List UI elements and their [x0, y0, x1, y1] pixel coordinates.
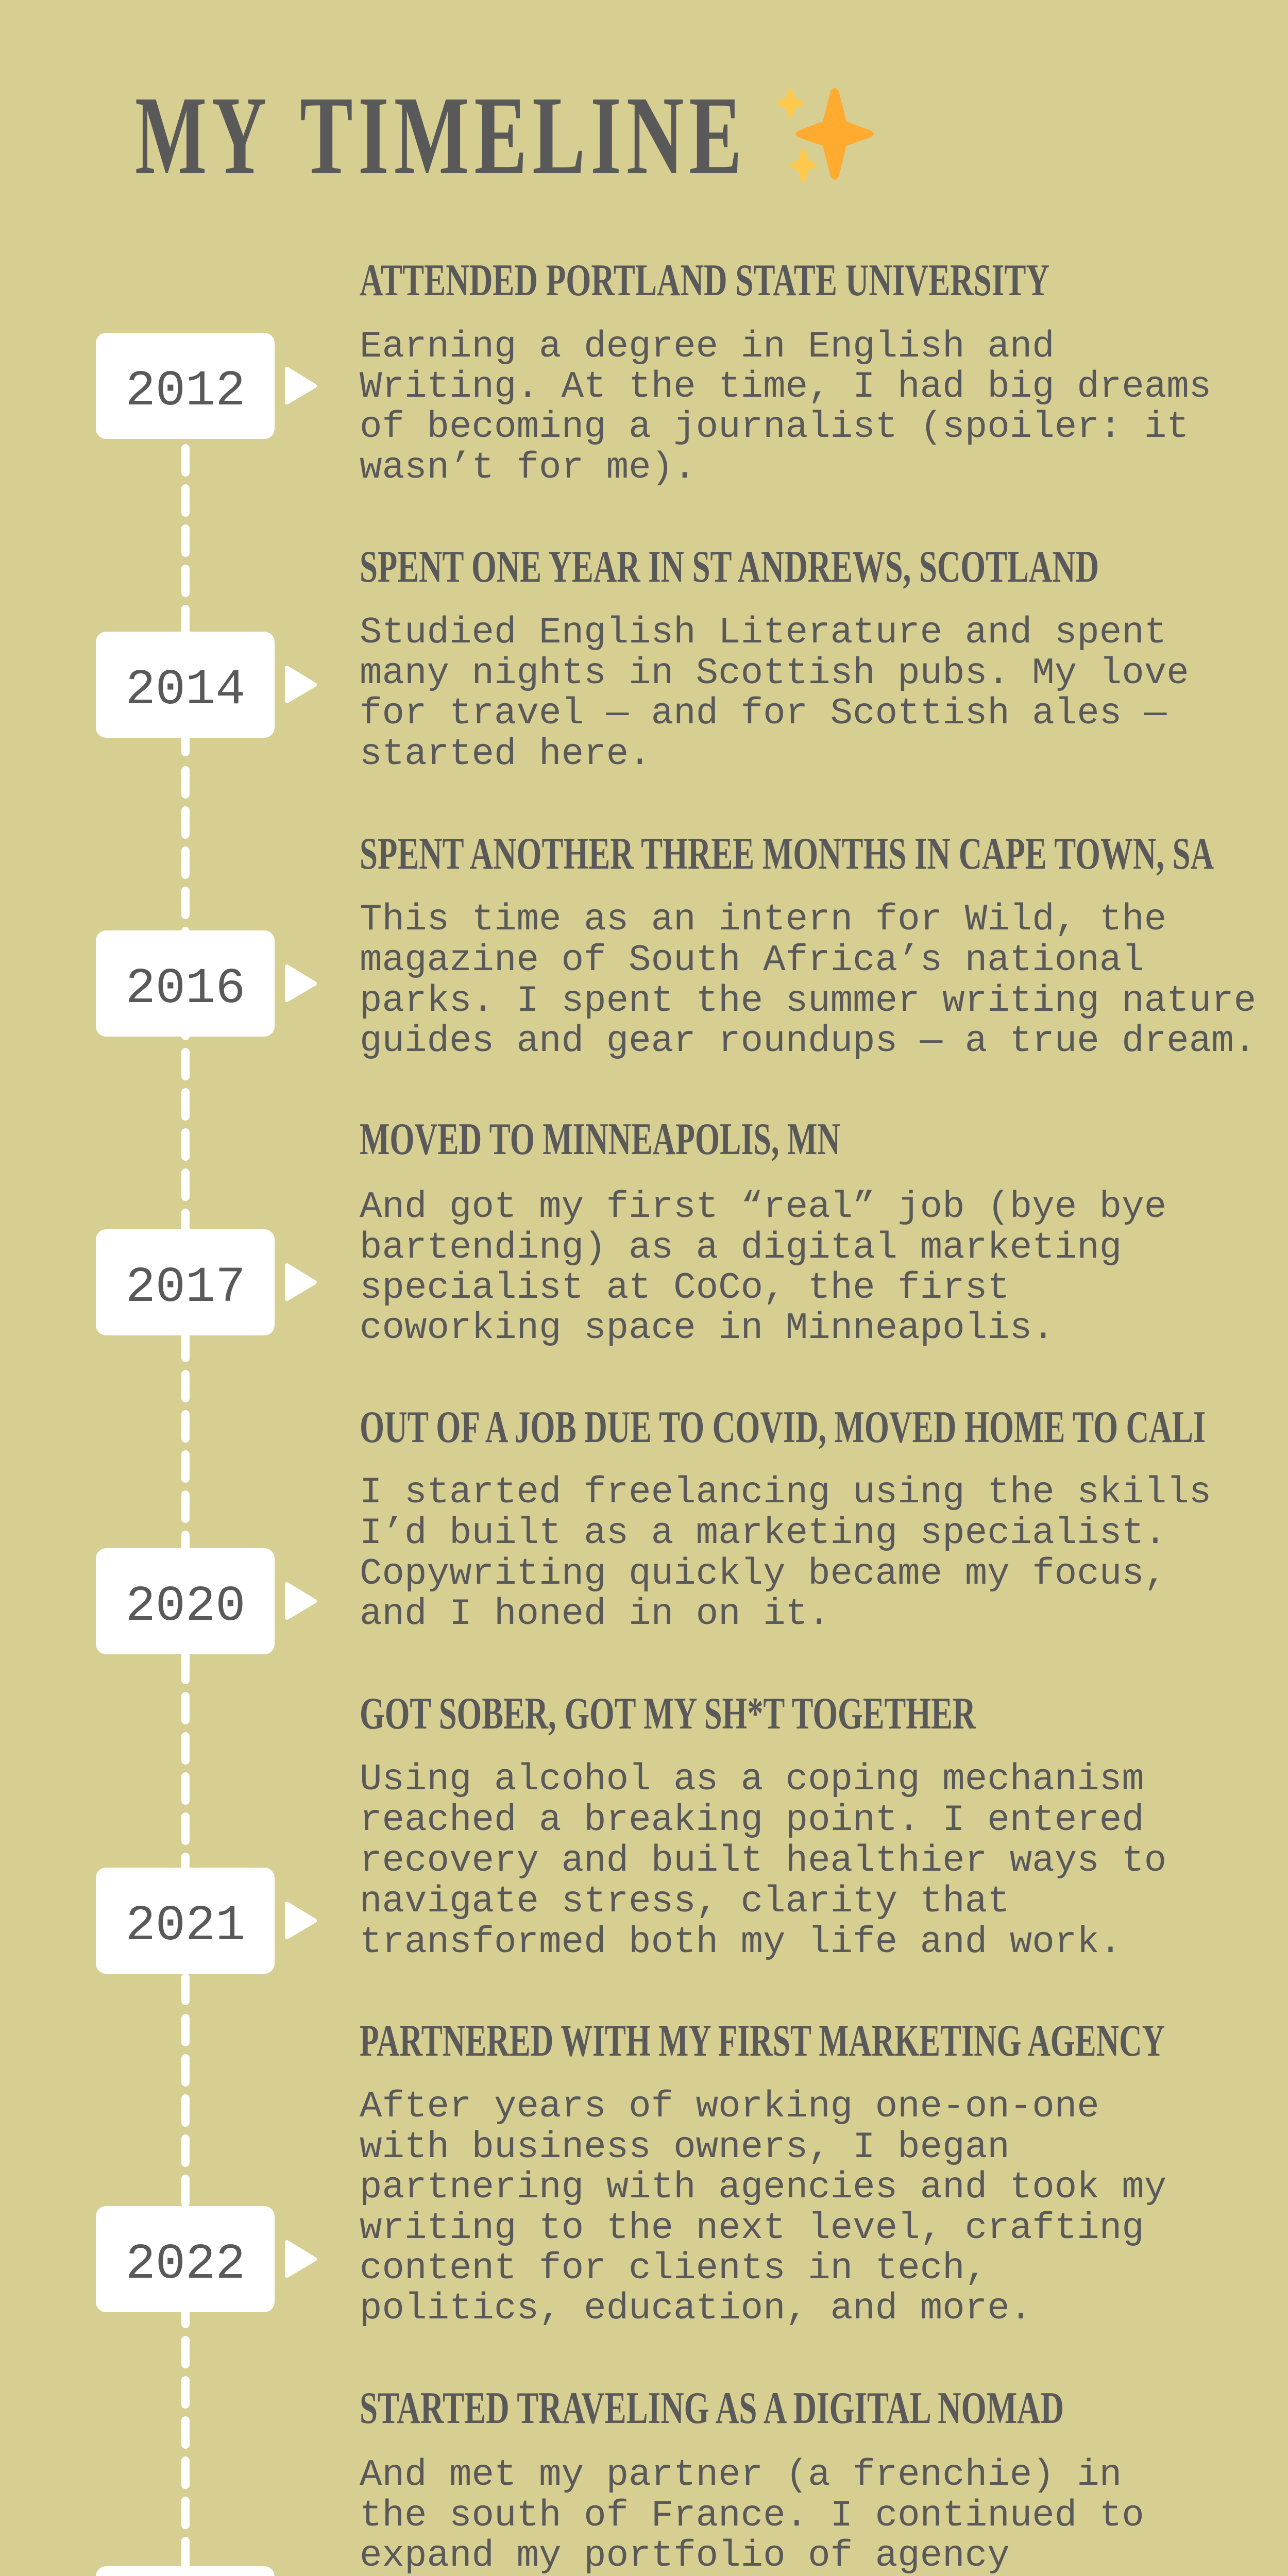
arrow 2020 — [287, 1584, 315, 1618]
text block 2012: wasn’t for me). — [360, 447, 696, 489]
panel: 2017 entry — [96, 1114, 1166, 1349]
heading 2017: MOVED TO MINNEAPOLIS, MN — [360, 1114, 840, 1164]
arrow 2014 — [287, 668, 315, 701]
text block 2021: reached a breaking point. I entered — [360, 1799, 1144, 1841]
text block 2020: I started freelancing using the skills — [360, 1471, 1211, 1514]
text block 2022: writing to the next level, crafting — [360, 2207, 1144, 2249]
text block 2016: magazine of South Africa’s national — [360, 939, 1144, 981]
text block 2016: guides and gear roundups — a true dream. — [360, 1020, 1256, 1062]
text block 2012: of becoming a journalist (spoiler: it — [360, 406, 1189, 448]
year badge 2016 — [96, 930, 275, 1037]
text block 2023 — [360, 2454, 1144, 2576]
text block 2017: specialist at CoCo, the first — [360, 1267, 1010, 1309]
text block 2023: the south of France. I continued to — [360, 2495, 1144, 2537]
year badge 2012: 2012 — [126, 363, 245, 420]
text block 2021: recovery and built healthier ways to — [360, 1840, 1166, 1882]
panel: 2023 entry — [96, 2383, 1144, 2576]
year badge 2021 — [96, 1868, 275, 1974]
text block 2014 — [360, 612, 1189, 775]
year badge 2014 — [96, 632, 275, 738]
text block 2016: parks. I spent the summer writing nature — [360, 980, 1256, 1022]
year badge 2023 — [96, 2566, 275, 2576]
panel: 2016 entry — [96, 829, 1256, 1062]
text block 2021: Using alcohol as a coping mechanism — [360, 1758, 1144, 1801]
text block 2022: politics, education, and more. — [360, 2287, 1032, 2330]
title: MY — [135, 74, 272, 198]
year badge 2022: 2022 — [126, 2236, 245, 2293]
year badge 2020 — [96, 1548, 275, 1654]
title — [135, 74, 747, 198]
text block 2020 — [360, 1471, 1211, 1635]
year badge 2020: 2020 — [126, 1579, 245, 1635]
year badge 2014: 2014 — [126, 662, 245, 719]
text block 2017: coworking space in Minneapolis. — [360, 1307, 1055, 1349]
text block 2016 — [360, 899, 1256, 1062]
arrow 2017 — [287, 1265, 315, 1299]
text block 2012 — [360, 326, 1211, 489]
heading 2021: GOT SOBER, GOT MY SH*T TOGETHER — [360, 1689, 976, 1739]
text block 2020: and I honed in on it. — [360, 1593, 831, 1635]
text block 2012: Earning a degree in English and — [360, 326, 1055, 368]
text block 2012: Writing. At the time, I had big dreams — [360, 366, 1211, 408]
panel: 2021 entry — [96, 1689, 1166, 1974]
text block 2017 — [360, 1186, 1166, 1349]
text block 2021 — [360, 1758, 1166, 1963]
arrow 2021 — [287, 1904, 315, 1937]
year badge 2017: 2017 — [126, 1260, 245, 1316]
arrow 2022 — [287, 2242, 315, 2276]
text block 2022: with business owners, I began — [360, 2126, 1010, 2168]
text block 2023: And met my partner (a frenchie) in — [360, 2454, 1122, 2496]
panel: 2012 entry — [96, 256, 1211, 489]
text block 2023: expand my portfolio of agency — [360, 2535, 1010, 2576]
text block 2021: navigate stress, clarity that — [360, 1880, 1010, 1923]
year badge 2016: 2016 — [126, 961, 245, 1018]
text block 2022: content for clients in tech, — [360, 2247, 987, 2290]
year badge 2021: 2021 — [126, 1898, 245, 1955]
text block 2017: bartending) as a digital marketing — [360, 1227, 1122, 1269]
text block 2014: started here. — [360, 733, 651, 775]
text block 2020: I’d built as a marketing specialist. — [360, 1512, 1166, 1554]
year badge 2017 — [96, 1229, 275, 1335]
year badge 2012 — [96, 333, 275, 439]
text block 2014: many nights in Scottish pubs. My love — [360, 652, 1189, 694]
year badge 2022 — [96, 2206, 275, 2312]
text block 2021: transformed both my life and work. — [360, 1921, 1122, 1963]
text block 2014: for travel — and for Scottish ales — — [360, 692, 1167, 735]
text block 2022 — [360, 2086, 1166, 2330]
panel: 2020 entry — [96, 1402, 1211, 1654]
text block 2022: After years of working one-on-one — [360, 2086, 1099, 2128]
panel: 2022 entry — [96, 2016, 1166, 2330]
text block 2022: partnering with agencies and took my — [360, 2166, 1166, 2209]
icon: sparkles — [776, 88, 874, 182]
text block 2017: And got my first “real” job (bye bye — [360, 1186, 1166, 1228]
arrow 2016 — [287, 967, 315, 1000]
dashed timeline connector — [181, 444, 190, 2576]
arrow 2012 — [287, 369, 315, 402]
title: TIMELINE — [300, 74, 747, 198]
text block 2014: Studied English Literature and spent — [360, 612, 1166, 654]
text block 2016: This time as an intern for Wild, the — [360, 899, 1166, 941]
panel: 2014 entry — [96, 542, 1189, 775]
text block 2020: Copywriting quickly became my focus, — [360, 1553, 1166, 1595]
